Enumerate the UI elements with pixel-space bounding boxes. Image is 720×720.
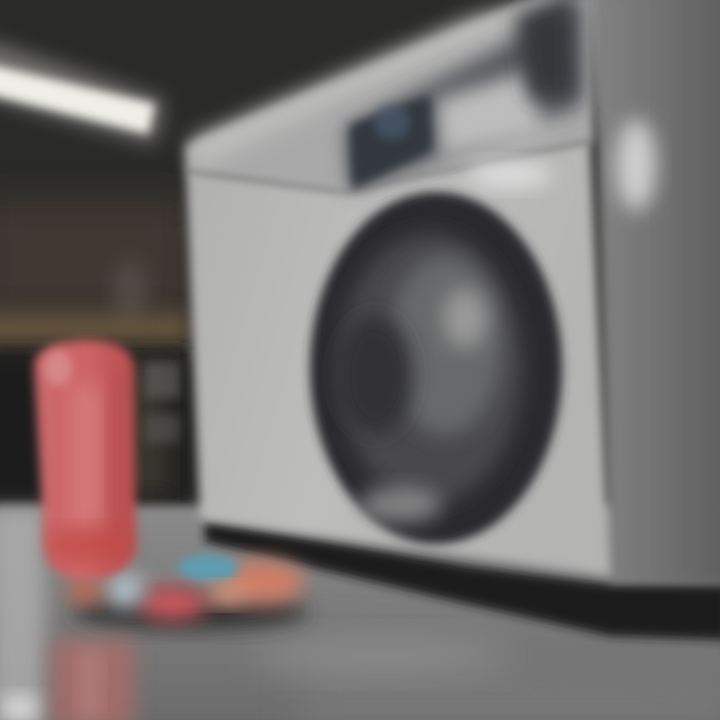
side highlight xyxy=(616,119,656,211)
clothes pile xyxy=(67,554,308,630)
washer top control panel xyxy=(186,0,594,195)
washer door xyxy=(310,192,562,544)
floor xyxy=(0,505,720,720)
detergent bottle xyxy=(34,340,136,579)
ceiling light xyxy=(0,38,165,145)
bottle reflection on floor xyxy=(52,640,134,720)
washer right side xyxy=(585,0,720,584)
washer front panel xyxy=(186,140,610,576)
washer base shadow xyxy=(205,520,720,640)
